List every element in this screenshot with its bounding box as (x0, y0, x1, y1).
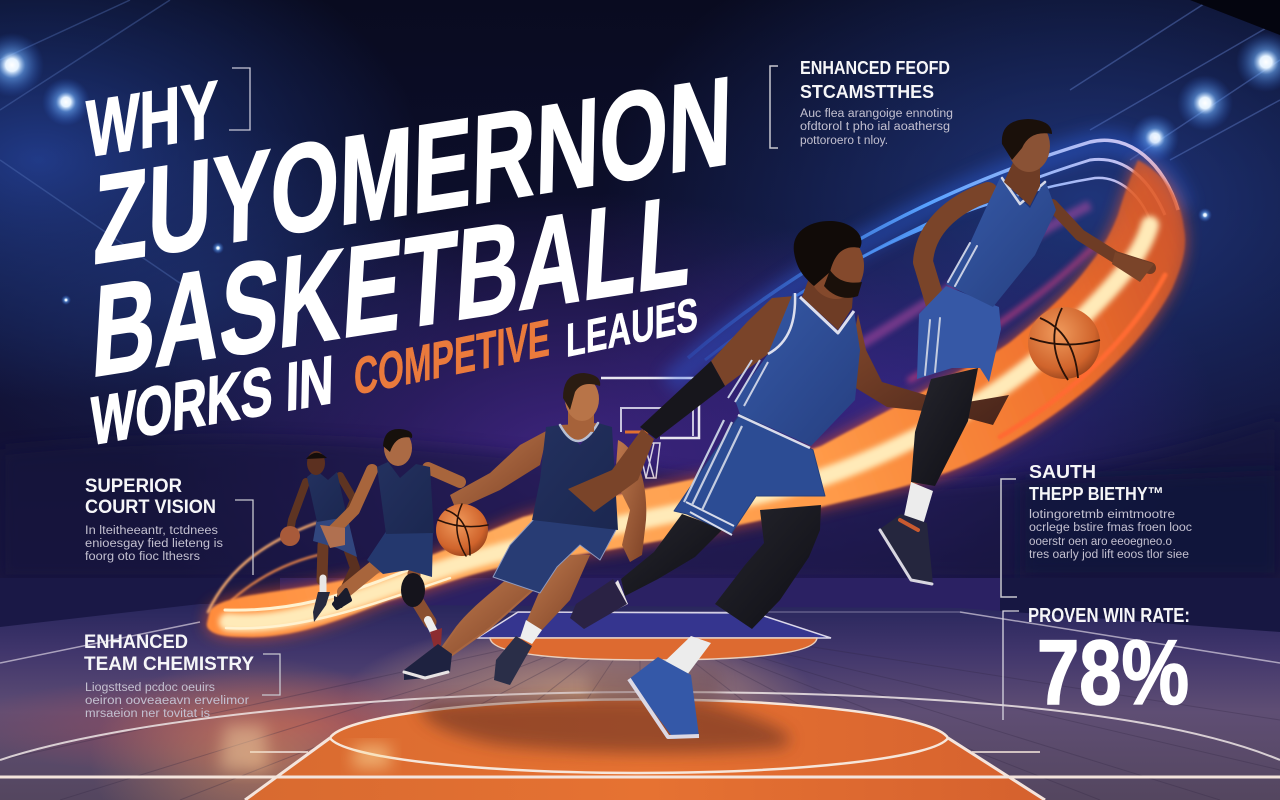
callout: enhanced field strengths: ENHANCED FEOFD (800, 58, 950, 78)
callout: enhanced field strengths: ofdtorol t pho ial aoathersg (800, 121, 950, 133)
player 2 (320, 429, 460, 648)
callout: enhanced team chemistry (84, 632, 280, 720)
player 4: large centre (568, 221, 1009, 739)
jersey (735, 293, 860, 446)
basketball hoop (601, 378, 699, 478)
stat: proven win rate (1003, 605, 1190, 724)
callout: enhanced field strengths: STCAMSTTHES (800, 82, 934, 102)
basketball in the air (1028, 307, 1100, 380)
callout: speed (1001, 461, 1192, 597)
callout: superior court vision: enioesgay fied lieteng is (85, 538, 223, 550)
callout: superior court vision: COURT VISION (85, 497, 216, 518)
callout: speed: SAUTH (1029, 461, 1096, 482)
callout: superior court vision: SUPERIOR (85, 476, 182, 497)
player 1: far left (280, 451, 357, 622)
callout: speed: ocrlege bstire fmas froen looc (1029, 522, 1192, 534)
callout: enhanced team chemistry: ENHANCED (84, 632, 188, 653)
callout: speed: ooerstr oen aro eeoegneo.o (1029, 536, 1172, 548)
arms (568, 296, 1009, 512)
back leg (570, 514, 723, 629)
front leg (629, 505, 821, 739)
crowd stands (0, 420, 1280, 632)
title line: why: WHY (86, 64, 218, 175)
callout: enhanced team chemistry: oeiron ooveaeavn ervelimor (85, 695, 249, 707)
floor light reflections (220, 725, 268, 770)
callout: superior court vision: foorg oto fioc lthesrs (85, 551, 200, 563)
callout: superior court vision: In lteitheeantr, tctdnees (85, 525, 218, 537)
title line: works in: WORKS IN (90, 341, 334, 460)
wood plank lines (0, 620, 1280, 800)
callout: speed: THEPP BIETHY™ (1029, 483, 1164, 504)
stadium lights right (1070, 0, 1280, 222)
callout: enhanced field strengths: pottoroero t nloy. (800, 135, 888, 147)
floor shadows (420, 698, 790, 753)
callout: speed: lotingoretmb eimtmootre (1029, 509, 1175, 521)
callout: enhanced team chemistry: mrsaeion ner tovitat is (85, 708, 210, 720)
title line: competive: COMPETIVE (354, 308, 550, 407)
orange motion swoosh (207, 160, 1185, 637)
callout: enhanced team chemistry: Liogsttsed pcdoc oeuirs (85, 682, 215, 694)
callout: enhanced team chemistry: TEAM CHEMISTRY (84, 654, 254, 675)
blue motion streak (670, 140, 1180, 385)
callout: enhanced field strengths (770, 58, 953, 148)
neck and head (802, 270, 854, 330)
title line: zuyomernon: ZUYOMERNON (92, 49, 733, 291)
stat: proven win rate: PROVEN WIN RATE: (1028, 605, 1190, 627)
player 3 (404, 373, 646, 685)
title line: basketball: BASKETBALL (88, 165, 696, 405)
player 5: jumping top right (880, 119, 1154, 584)
stadium lights left (0, 0, 224, 305)
title (86, 49, 733, 460)
callout: superior court vision (85, 476, 253, 575)
far key area (0, 612, 1280, 663)
center court circle (0, 670, 1280, 800)
stat: proven win rate: 78% (1037, 622, 1189, 724)
shorts (674, 414, 825, 534)
callout: enhanced field strengths: Auc flea arangoige ennoting (800, 108, 953, 120)
callout: speed: tres oarly jod lift eoos tlor siee (1029, 549, 1189, 561)
title line: leaues: LEAUES (566, 288, 698, 368)
